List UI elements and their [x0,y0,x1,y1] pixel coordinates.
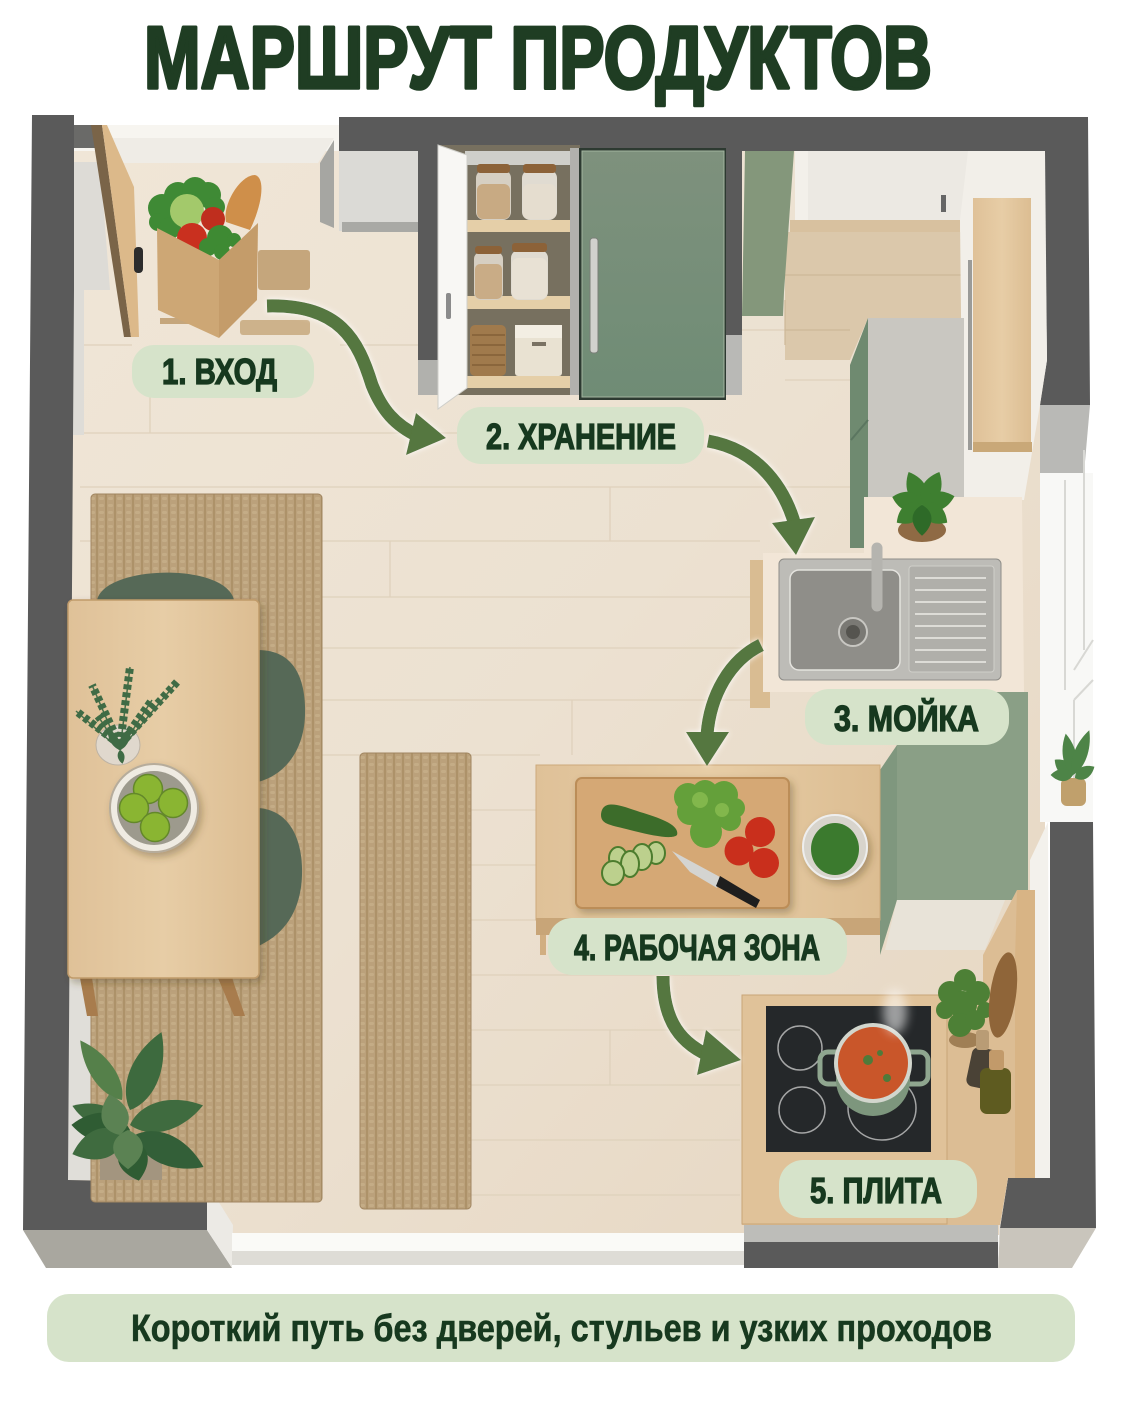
plant: parsley [936,969,993,1048]
work table [536,765,880,955]
label: step 4 [548,918,847,975]
pot [820,1023,928,1116]
label: step 1: 1. ВХОД [162,351,277,392]
arrow: sink to work area [686,645,761,766]
doormat [160,250,310,335]
floor [68,125,1045,1235]
entry threshold and door recess [74,125,419,290]
sink [779,548,1001,680]
plant: counter basil [890,468,957,542]
label: step 4: 4. РАБОЧАЯ ЗОНА [574,927,820,968]
pantry shelves [467,220,570,388]
arrow: work area to stove [663,976,741,1075]
caption bar [47,1294,1075,1362]
table legs [80,978,245,1016]
herb bowl [803,815,867,879]
pantry [438,145,580,409]
door [91,125,143,337]
steam [883,990,907,1034]
label: step 3 [805,689,1009,745]
pantry basket and box [470,325,562,376]
rugs [91,494,471,1209]
knife [672,851,760,908]
bag body [157,228,219,338]
walls [23,115,1096,1268]
label: step 5 [779,1160,977,1218]
green lower cabinet [880,692,1028,955]
window [1030,450,1093,1178]
countertop with sink [750,468,1024,708]
lettuce [674,780,745,848]
label: step 5: 5. ПЛИТА [810,1170,942,1211]
vase with branches [76,667,177,765]
wood board [984,951,1022,1039]
fridge [579,148,726,400]
chairs [97,573,305,947]
table top [68,600,259,978]
pantry door [438,145,467,409]
tomatoes [724,817,779,878]
bowl of apples [110,764,198,852]
oil bottles [965,1030,1011,1114]
dining table group [68,573,305,1016]
arrow: entry to storage [267,306,446,455]
plant: window pot [1050,728,1097,806]
right-side kitchen background units [742,151,1047,548]
label: step 2 [457,407,704,464]
caption bar: Короткий путь без дверей, стульев и узких проходов [131,1308,992,1350]
cucumber [601,804,677,885]
label: step 2: 2. ХРАНЕНИЕ [486,416,676,457]
bag vegetables [148,175,261,260]
pantry jars [474,164,557,300]
plant: floor corner [67,1027,210,1184]
arrow: storage to sink [708,441,815,555]
label: step 3: 3. МОЙКА [834,697,979,739]
label: step 1 [132,345,314,398]
cutting board [576,778,789,908]
stove counter [742,890,1035,1225]
cooktop [766,1006,931,1152]
grocery bag [148,175,261,338]
